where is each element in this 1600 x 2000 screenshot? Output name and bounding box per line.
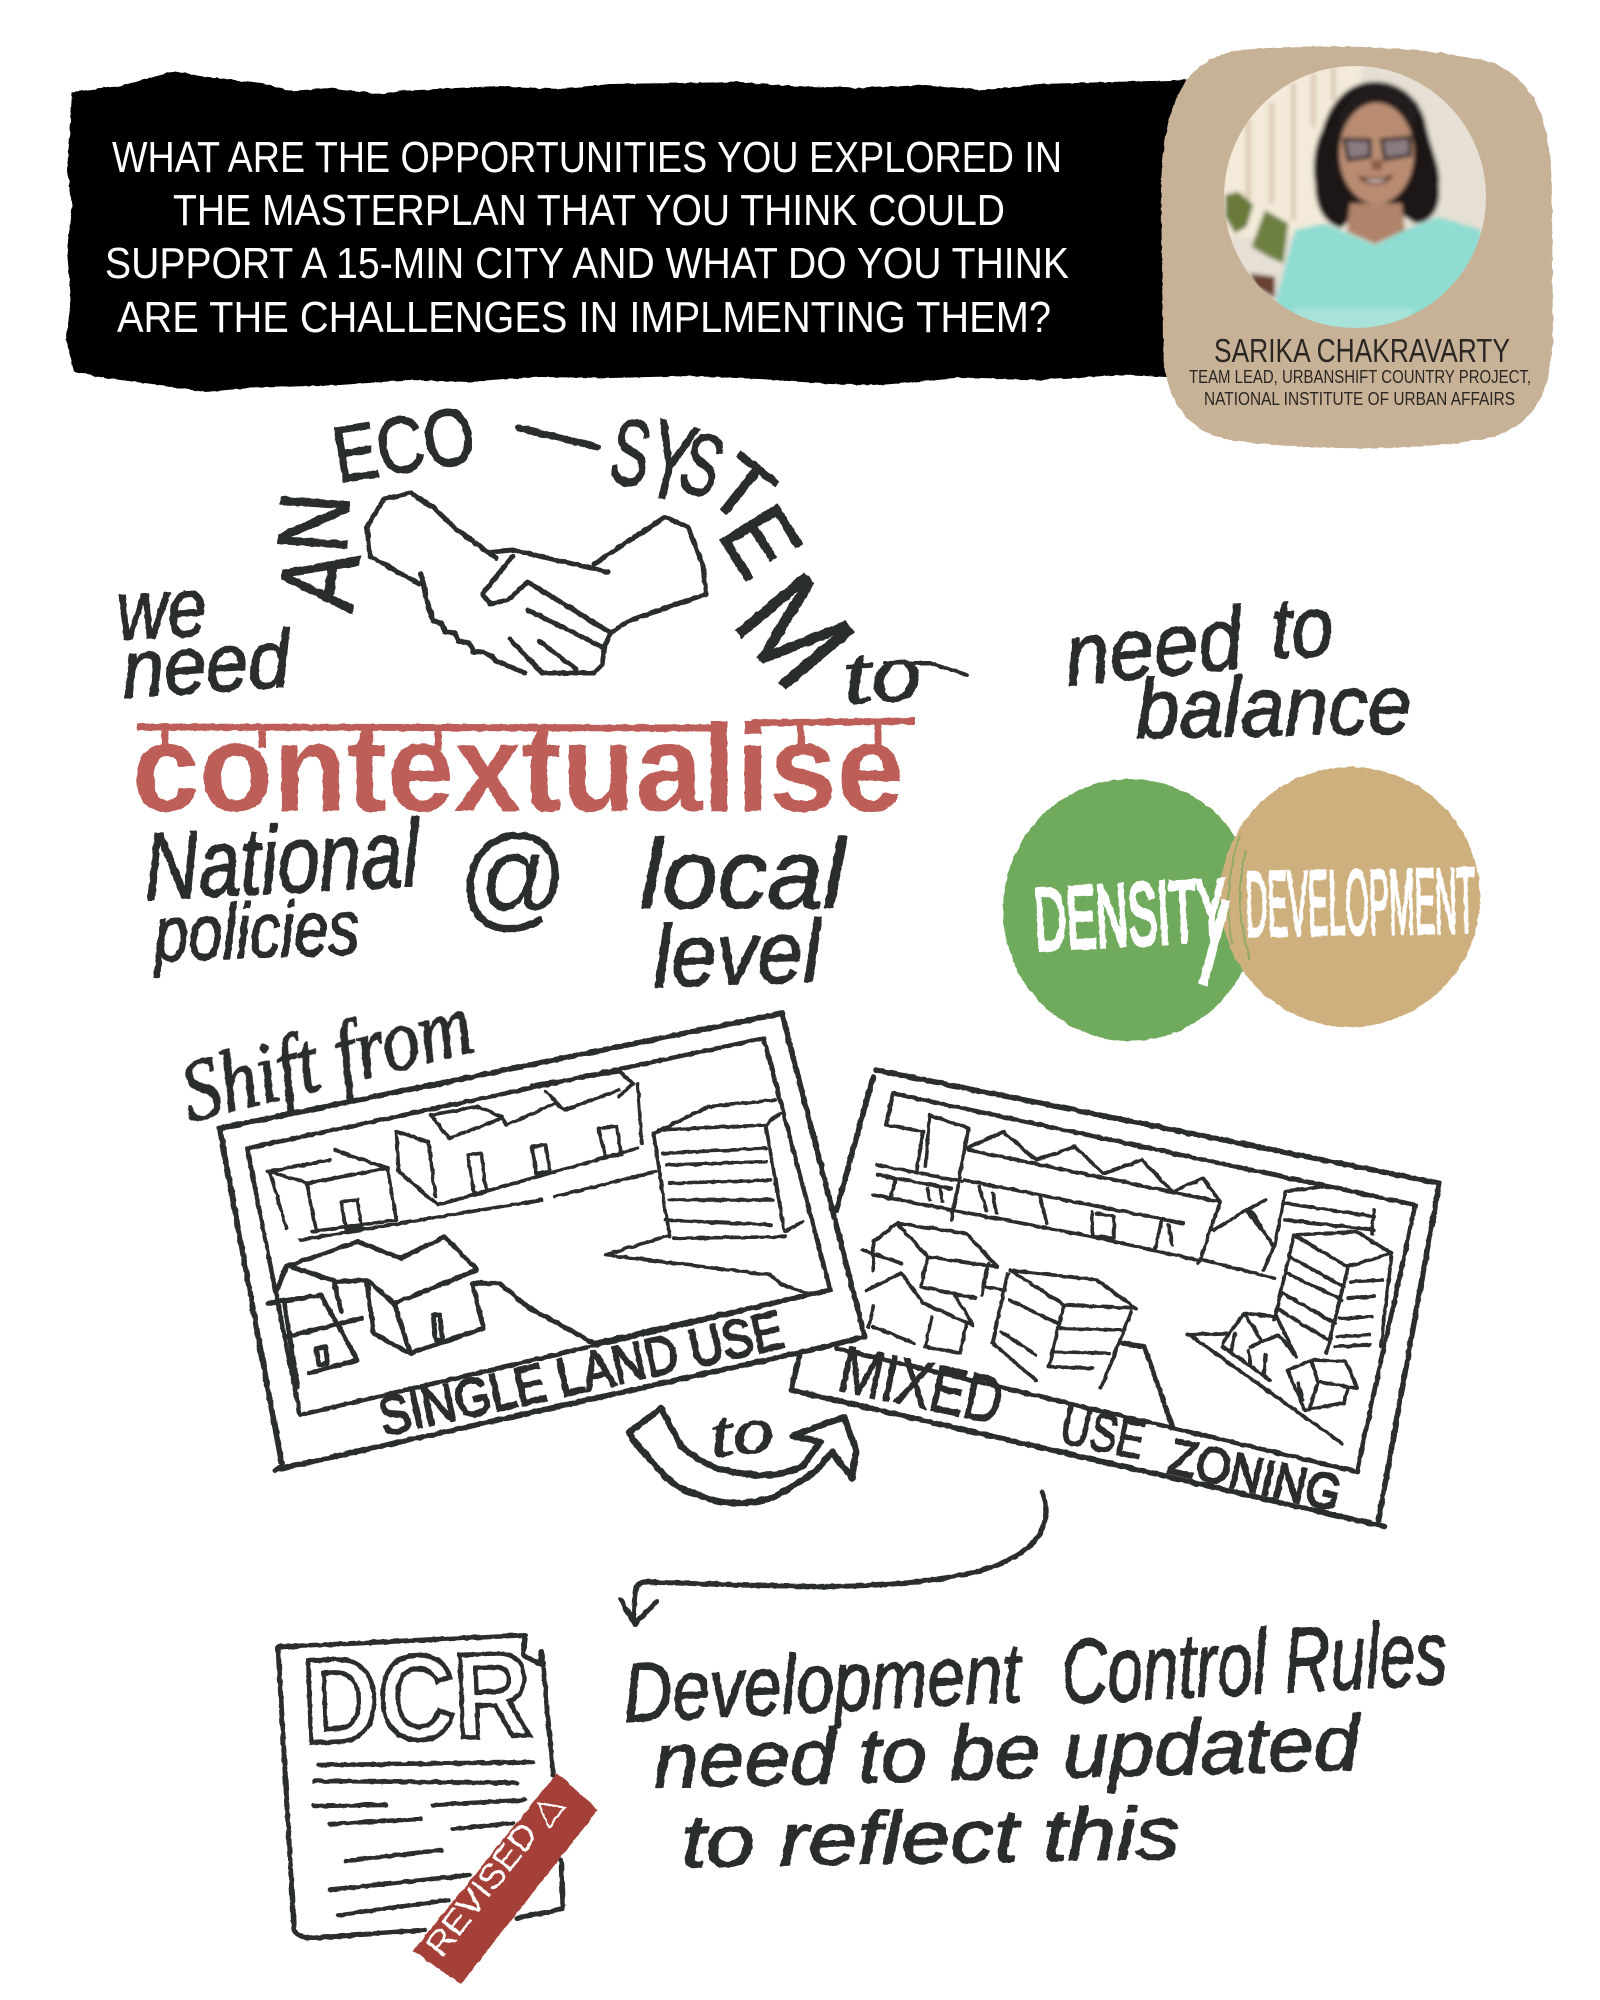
panel: balance density and development <box>1003 579 1480 1041</box>
speaker name: SARIKA CHAKRAVARTY <box>1214 332 1510 369</box>
speaker role: NATIONAL INSTITUTE OF URBAN AFFAIRS <box>1204 389 1515 409</box>
caption: mixed use zoning: USE <box>1056 1395 1150 1471</box>
question text <box>105 133 1069 342</box>
stamp: revised: REVISED △ <box>418 1785 570 1964</box>
document lines <box>314 1762 533 1915</box>
question banner <box>66 71 1190 392</box>
polaroid backing <box>220 1013 865 1470</box>
arrow: to <box>629 1393 856 1503</box>
arched text: an eco-system: E <box>698 486 824 596</box>
text: local level: local <box>640 819 847 929</box>
text: development control rules: to reflect this <box>681 1791 1180 1883</box>
arched text: an eco-system: ECO <box>327 390 481 500</box>
text: shift from: Shift from <box>171 976 482 1141</box>
text: we need: need <box>119 613 295 716</box>
arched text: an eco-system: T <box>693 436 791 542</box>
question text: THE MASTERPLAN THAT YOU THINK COULD <box>173 186 1005 235</box>
text: local level: level <box>651 901 825 1006</box>
document title: DCR <box>300 1627 533 1769</box>
speaker portrait <box>1222 63 1492 330</box>
sketch: mixed use neighbourhood <box>791 1070 1439 1527</box>
text: to <box>840 625 967 723</box>
text: need to balance <box>1060 579 1412 756</box>
caption: single land use: SINGLE LAND USE <box>374 1300 789 1448</box>
text: development control rules: Development <box>621 1625 1026 1740</box>
arched text: an eco-system: N <box>256 489 372 557</box>
arrow: to development control rules <box>621 1492 1046 1624</box>
arched text: an eco-system: S <box>669 412 736 517</box>
caption: mixed use zoning: MIXED <box>833 1331 1010 1438</box>
circle: density <box>1003 779 1257 1041</box>
text: national policies: policies <box>151 883 360 978</box>
text: national policies: National <box>141 800 424 921</box>
caption: mixed use zoning: ZONING <box>1164 1428 1347 1522</box>
text: development control rules <box>621 1602 1450 1883</box>
panel: mixed use zoning sketch <box>791 1070 1439 1527</box>
document outline <box>278 1635 563 1938</box>
arched text: an eco-system: Y <box>635 396 707 526</box>
label: density: DENSITY <box>1032 860 1229 969</box>
panel: speaker card <box>1161 46 1553 448</box>
speaker role <box>1189 367 1531 409</box>
circle: development <box>1220 767 1480 1027</box>
text: we need <box>114 559 295 716</box>
text: development control rules: need to be updated <box>652 1698 1363 1805</box>
stamp: revised <box>413 1773 598 1984</box>
arched text: an eco-system <box>255 390 882 715</box>
text: to: to <box>840 625 924 723</box>
text: contextualise: contextualise <box>132 700 904 838</box>
arched text: an eco-system: A <box>255 543 383 617</box>
question text: ARE THE CHALLENGES IN IMPLMENTING THEM? <box>117 293 1051 342</box>
arched text: an eco-system: M <box>708 547 882 715</box>
question text: WHAT ARE THE OPPORTUNITIES YOU EXPLORED IN <box>112 133 1062 182</box>
panel: dcr document <box>278 1627 598 1984</box>
caption: mixed use zoning <box>833 1331 1347 1522</box>
speaker role: TEAM LEAD, URBANSHIFT COUNTRY PROJECT, <box>1189 367 1531 387</box>
text: need to balance: to <box>1269 579 1335 677</box>
text: we need: we <box>114 559 209 658</box>
text: need to balance: balance <box>1135 657 1412 756</box>
text: local level <box>640 819 847 1006</box>
text: national policies <box>141 800 424 978</box>
symbol: at sign: @ <box>458 811 568 941</box>
overlap hatching <box>1228 835 1250 960</box>
text: need to balance: need <box>1060 588 1250 705</box>
sketch: single use neighbourhood <box>220 1013 865 1470</box>
icon: handshake <box>367 493 706 673</box>
panel: ecosystem and contextualise <box>114 390 967 1006</box>
arrow label: to <box>706 1393 777 1472</box>
label: density <box>1032 860 1229 985</box>
arched text: an eco-system: S <box>603 398 659 508</box>
question text: SUPPORT A 15-MIN CITY AND WHAT DO YOU THINK <box>105 239 1069 288</box>
panel: single land use sketch <box>220 1013 865 1470</box>
